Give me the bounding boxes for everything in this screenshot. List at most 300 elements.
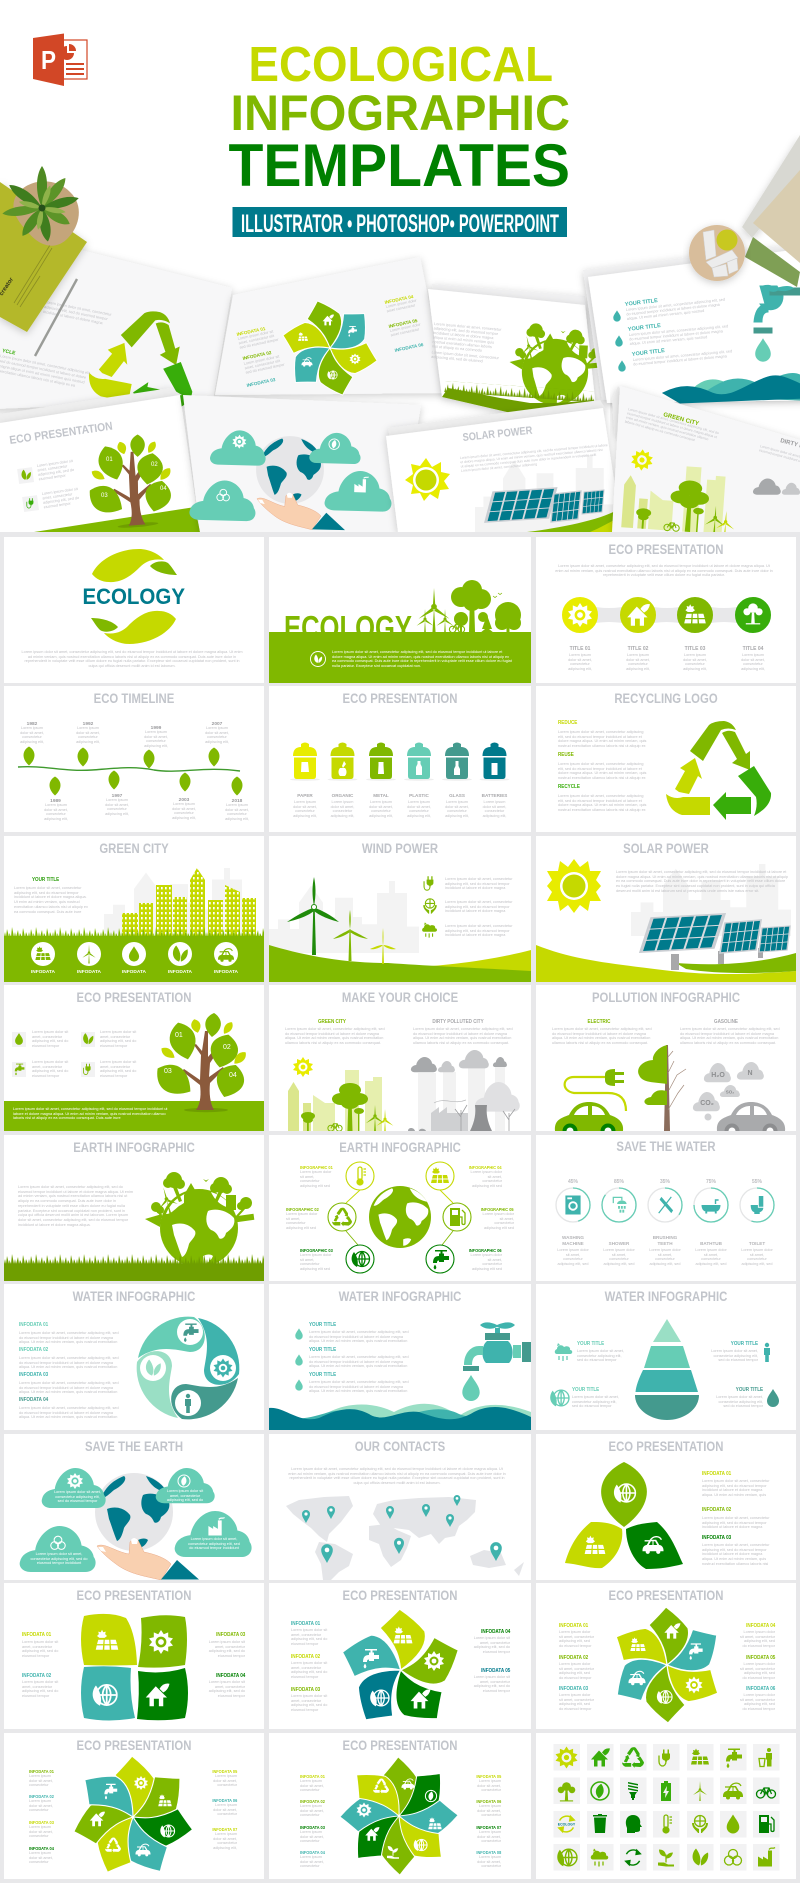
text block: Lorem ipsum dolor sit amet, consectetur adipiscing elit, sed do eiusmod tempor incididunt ut labore et dolore magna aliqua. Ut enim ad minim veniam, quis nostrud exercitation ullamco laboris nisi ut aliquip ex ea commodo consequat. Duis aute irure dolor in reprehenderit in voluptate velit esse cillum dolore eu fugiat nulla pariatur. Excepteur sint occaecat cupidatat non proident, sunt in culpa qui officia deserunt mollit anim id est laborum sed ut perspiciatis unde omnis iste natus error sit. bbox=[616, 870, 788, 893]
panel: six petals bbox=[536, 1583, 796, 1729]
stacked slide: tree: Lorem ipsum dolor sit bbox=[37, 459, 74, 468]
gauge circles: 35% bbox=[660, 1179, 671, 1185]
stacked slide: flower infographic: amet consectetur bbox=[390, 327, 420, 337]
heading: OUR CONTACTS bbox=[355, 1439, 445, 1454]
icon grid: ECOLOGY bbox=[558, 1822, 576, 1826]
tap and waves bbox=[269, 1322, 531, 1430]
timeline chart: 2007 bbox=[212, 721, 223, 727]
info list: YOUR TITLE bbox=[309, 1322, 336, 1328]
info blocks: INFODATA 02 bbox=[291, 1654, 320, 1660]
panel: earth infographic hexagon bbox=[269, 1135, 531, 1281]
petal diagram bbox=[74, 1756, 192, 1872]
label: reduce: REDUCE bbox=[558, 720, 577, 726]
labels and notes: INFOGRAPHIC 04 bbox=[469, 1165, 502, 1170]
panel: eight petals bbox=[269, 1733, 531, 1879]
stacked slide: solar power: et dolore magna aliqua. Ut enim ad minim veniam, quis nostrud exercitation ullamco laboris nisi bbox=[460, 448, 603, 464]
info blocks bbox=[291, 1621, 510, 1712]
earth illustration bbox=[4, 1172, 264, 1281]
stacked slide: tree: ECO PRESENTATION bbox=[9, 421, 113, 447]
info blocks: INFODATA 01 bbox=[29, 1769, 54, 1774]
info list: INFODATA 02 bbox=[19, 1347, 48, 1353]
solar illustration bbox=[536, 859, 796, 982]
info blocks: INFODATA 07 bbox=[212, 1827, 237, 1832]
stacked slide: flower infographic: INFODATA 03 bbox=[246, 377, 276, 388]
info list: Lorem ipsum dolor sit amet, consectetur adipiscing elit, sed do eiusmod tempor incididunt ut labore et dolore magna aliqua. Ut enim ad minim veniam, quis nostrud exercitation bbox=[19, 1331, 119, 1344]
process circles: TITLE 03 bbox=[685, 646, 706, 652]
info list: INFODATA 03 bbox=[19, 1372, 48, 1378]
labels and notes: Lorem ipsum dolor sit amet, consectetur adipiscing elit sed bbox=[483, 1212, 514, 1230]
gauge circles: MACHINE bbox=[562, 1241, 584, 1246]
info list: INFODATA 01 bbox=[19, 1322, 48, 1328]
heading: ECO PRESENTATION bbox=[609, 1439, 723, 1454]
stacked slide: green city: Lorem ipsum dolor sit amet, consectetur adipiscing elit, sed do bbox=[628, 407, 719, 435]
process circles bbox=[562, 597, 771, 652]
heading: ECO TIMELINE bbox=[94, 691, 174, 706]
tree and icons: 01 bbox=[175, 1032, 183, 1039]
stacked slide: recycling: sed do eiusmod tempor incididunt ut labore et dolore bbox=[0, 359, 86, 380]
info blocks: INFODATA 02 bbox=[29, 1794, 54, 1799]
heading: ECO PRESENTATION bbox=[609, 1588, 723, 1603]
petal diagram bbox=[340, 1758, 458, 1874]
desk item: magazine and plant bbox=[0, 166, 87, 356]
desk item: box, bowl and folder bbox=[689, 135, 800, 287]
car and tree illustration: H₂O bbox=[711, 1072, 725, 1079]
timeline chart: 1992 bbox=[83, 721, 94, 727]
leaf diagram bbox=[565, 1462, 683, 1569]
heading: POLLUTION INFOGRAPHIC bbox=[592, 990, 740, 1005]
petal diagram bbox=[81, 1614, 188, 1720]
heading: EARTH INFOGRAPHIC bbox=[339, 1140, 461, 1155]
bins: PAPER bbox=[297, 793, 313, 798]
stacked slide: flower infographic: amet, consectetur elit bbox=[244, 359, 281, 370]
heading: ECO PRESENTATION bbox=[77, 990, 191, 1005]
stacked slide: solar power: ut aliquip ex ea commodo consequat duis aute irure dolor in reprehenderit in voluptate velit bbox=[460, 453, 596, 469]
info blocks: INFODATA 04 bbox=[481, 1629, 510, 1635]
icon: PowerPoint logo bbox=[33, 34, 87, 86]
bin notes bbox=[293, 800, 506, 818]
bins bbox=[290, 742, 509, 798]
labels and notes: Lorem ipsum dolor sit amet, consectetur adipiscing elit sed bbox=[286, 1212, 317, 1230]
info blocks: INFODATA 06 bbox=[476, 1799, 501, 1804]
title: INFOGRAPHIC bbox=[230, 85, 570, 141]
panel: recycling bins bbox=[269, 686, 531, 832]
stacked slide: flower infographic bbox=[215, 257, 447, 408]
stacked slide: flower infographic: INFODATA 01 bbox=[236, 326, 266, 337]
stacked slide: recycling: adipiscing elit, sed do eiusmod tempor bbox=[44, 305, 109, 321]
info blocks: INFODATA 02 bbox=[559, 1655, 588, 1661]
column texts bbox=[568, 653, 765, 671]
stacked slide: green earth bbox=[428, 284, 604, 415]
info blocks: INFODATA 03 bbox=[216, 1632, 245, 1638]
year notes bbox=[20, 726, 249, 821]
city illustrations bbox=[288, 1050, 520, 1131]
stacked slide: flower infographic: sed do eiusmod tempor bbox=[239, 337, 280, 350]
info list bbox=[309, 1322, 409, 1393]
tree and icons: 03 bbox=[164, 1068, 172, 1075]
layered drop bbox=[550, 1319, 779, 1420]
title: TEMPLATES bbox=[228, 132, 570, 199]
software banner: ILLUSTRATOR • PHOTOSHOP• POWERPOINT bbox=[241, 210, 559, 238]
band bbox=[4, 1101, 264, 1131]
heading: WATER INFOGRAPHIC bbox=[605, 1289, 727, 1304]
panel: seven petals bbox=[4, 1733, 264, 1879]
stacked slide: tree: eiusmod tempor bbox=[38, 474, 67, 481]
stacked slide: water: do eiusmod tempor incididunt ut labore et dolore magna bbox=[629, 329, 724, 341]
stacked slide: recycling bbox=[0, 222, 232, 418]
petal diagram bbox=[617, 1608, 717, 1722]
skyline and icons: INFODATA bbox=[122, 969, 147, 975]
gauge circles: SHOWER bbox=[609, 1241, 630, 1246]
panel: three leaves bbox=[536, 1434, 796, 1580]
car and tree illustration: N bbox=[747, 1070, 753, 1077]
stacked slide: green earth: aliqua ut enim ad minim veniam quis bbox=[433, 335, 494, 345]
info blocks: INFODATA 02 bbox=[22, 1673, 51, 1679]
gauge circles: 85% bbox=[614, 1179, 625, 1185]
heading: WATER INFOGRAPHIC bbox=[73, 1289, 195, 1304]
label: YOUR TITLE bbox=[32, 877, 59, 883]
gauge circles: BRUSHING bbox=[653, 1235, 678, 1240]
stacked slide: water: YOUR TITLE bbox=[628, 323, 662, 333]
info blocks: INFODATA 02 bbox=[300, 1799, 325, 1804]
heading: ECO PRESENTATION bbox=[77, 1588, 191, 1603]
stacked slide: water: do eiusmod tempor incididunt ut labore et dolore magna bbox=[626, 303, 721, 316]
car and tree illustration: CO₂ bbox=[700, 1100, 714, 1107]
panel: eco timeline bbox=[4, 686, 264, 832]
gauge circles: 75% bbox=[706, 1179, 717, 1185]
panel: our contacts bbox=[269, 1434, 531, 1580]
icon: PowerPoint logo: P bbox=[41, 45, 56, 75]
car and tree illustration: SO₂ bbox=[726, 1090, 734, 1094]
timeline chart: 1982 bbox=[27, 721, 38, 727]
panel: ecology silhouette: ECOLOGY bbox=[284, 609, 412, 646]
heading: WIND POWER bbox=[362, 841, 438, 856]
tree and icons: 02 bbox=[223, 1044, 231, 1051]
heading: SOLAR POWER bbox=[623, 841, 709, 856]
stacked slide: flower infographic: INFODATA 04 bbox=[384, 294, 414, 305]
info blocks: INFODATA 05 bbox=[476, 1774, 501, 1779]
process circles: TITLE 04 bbox=[743, 646, 764, 652]
info list: YOUR TITLE bbox=[309, 1347, 336, 1353]
stacked slide: flower infographic: INFODATA 06 bbox=[394, 342, 424, 353]
bins: ORGANIC bbox=[332, 793, 354, 798]
info blocks: INFODATA 08 bbox=[476, 1850, 501, 1855]
stacked slide: green earth: incididunt ut labore et dolore magna bbox=[433, 331, 495, 340]
labels and notes: INFOGRAPHIC 05 bbox=[481, 1207, 514, 1212]
info list: Lorem ipsum dolor sit amet, consectetur adipiscing elit, sed do eiusmod tempor incididunt ut labore et dolore magna aliqua. Ut enim ad minim veniam, quis nostrud exercitation bbox=[309, 1355, 409, 1368]
gauge circles: BATHTUB bbox=[700, 1241, 723, 1246]
heading: SAVE THE WATER bbox=[616, 1139, 716, 1154]
info blocks bbox=[269, 1771, 531, 1871]
heading: ECO PRESENTATION bbox=[609, 542, 723, 557]
panel: save the earth bbox=[4, 1434, 264, 1580]
cloud notes bbox=[30, 1489, 240, 1565]
panel: pollution infographic bbox=[536, 985, 796, 1131]
stacked slide: green earth: Lorem ipsum dolor sit amet, consectetur bbox=[431, 350, 500, 360]
stacked slide: green earth: Lorem ipsum dolor sit amet, consectetur bbox=[434, 322, 502, 332]
text block: Lorem ipsum dolor sit amet, consectetur adipiscing elit, sed do eiusmod tempor incididunt ut labore et dolore magna aliqua. Ut enim ad minim veniam, quis nostrud exercitation ullamco laboris nisi ut aliquip ex ea commodo consequat. Duis aute irure dolor in reprehenderit in voluptate velit esse cillum dolore eu fugiat nulla pariatur. Excepteur sint occaecat cupidatat non. bbox=[332, 650, 512, 668]
stacked slide: tree: 03 bbox=[101, 493, 108, 499]
stacked slide: green city: enim ad minim veniam, quis nostrud exercitation ullamco bbox=[626, 415, 709, 441]
labels and notes: Lorem ipsum dolor sit amet, consectetur adipiscing elit sed bbox=[300, 1170, 331, 1188]
panel: eco presentation tree bbox=[4, 985, 264, 1131]
stacked slide: tree: amet, consectetur bbox=[42, 492, 73, 500]
labels and notes: INFOGRAPHIC 06 bbox=[469, 1248, 502, 1253]
panel: recycling logo bbox=[536, 686, 796, 832]
skyline and icons: INFODATA bbox=[31, 969, 56, 975]
tree and icons: 04 bbox=[229, 1072, 237, 1079]
timeline chart: 1999 bbox=[151, 725, 162, 731]
notes bbox=[557, 1248, 773, 1266]
gauge circles: 55% bbox=[752, 1179, 763, 1185]
stacked slide: recycling: incididunt ut labore et dolore magna bbox=[43, 310, 104, 325]
stacked slide: green city: laboris nisi ut aliquip ex ea commodo consequat bbox=[624, 420, 695, 442]
info blocks: YOUR TITLE bbox=[736, 1387, 763, 1393]
label: recycle: RECYCLE bbox=[558, 784, 580, 790]
stacked slide: tree: 01 bbox=[106, 457, 113, 463]
stacked slide: water: Lorem ipsum dolor sit amet, consectetur adipiscing elit, sed bbox=[626, 298, 725, 312]
labels and notes: Lorem ipsum dolor sit amet, consectetur adipiscing elit sed bbox=[471, 1170, 502, 1188]
stacked slide: green earth: nostrud exercitation ullamco laboris bbox=[432, 340, 492, 349]
info blocks bbox=[559, 1623, 776, 1711]
timeline chart: 2018 bbox=[232, 798, 243, 804]
stacked slide: green earth: adipiscing elit, sed do eiusmod bbox=[431, 355, 483, 363]
gauge circles: WASHING bbox=[562, 1235, 584, 1240]
heading: ECO PRESENTATION bbox=[343, 1738, 457, 1753]
gauge circles bbox=[556, 1179, 775, 1246]
info blocks: INFODATA 04 bbox=[300, 1850, 325, 1855]
stacked slide: flower infographic: Lorem ipsum dolor sit bbox=[237, 329, 275, 341]
heading: ECO PRESENTATION bbox=[343, 691, 457, 706]
stacked slide: water: do eiusmod tempor incididunt ut labore et dolore magna bbox=[633, 354, 728, 366]
timeline chart: 1997 bbox=[112, 793, 123, 799]
stacked slide: solar power: Lorem ipsum dolor sit amet, consectetur adipiscing bbox=[461, 462, 537, 473]
info list bbox=[19, 1322, 119, 1419]
title bbox=[228, 38, 570, 199]
panel: save the water bbox=[536, 1135, 796, 1281]
panel: five petals bbox=[269, 1583, 531, 1729]
info list: Lorem ipsum dolor sit amet, consectetur adipiscing elit, sed do eiusmod tempor incididunt ut labore et dolore magna aliqua. Ut enim ad minim veniam, quis nostrud exercitation bbox=[19, 1381, 119, 1394]
stacked slide: water: YOUR TITLE bbox=[632, 348, 666, 358]
stacked slide: solar power bbox=[386, 400, 622, 533]
icon grid bbox=[536, 1733, 796, 1879]
labels and notes: INFOGRAPHIC 02 bbox=[286, 1207, 319, 1212]
skyline and icons: INFODATA bbox=[77, 969, 102, 975]
stacked slide: green city bbox=[612, 386, 800, 537]
world map with pins bbox=[286, 1495, 524, 1580]
bins: METAL bbox=[373, 793, 389, 798]
panel: make your choice bbox=[269, 985, 531, 1131]
info list: INFODATA 04 bbox=[19, 1397, 48, 1403]
gauge circles: TOILET bbox=[749, 1241, 765, 1246]
info blocks: INFODATA 05 bbox=[212, 1769, 237, 1774]
info list: INFODATA 03 bbox=[702, 1535, 731, 1541]
labels and notes bbox=[286, 1165, 514, 1271]
stacked slide: tree: adipiscing elit, sed do bbox=[38, 468, 74, 477]
heading: ECO PRESENTATION bbox=[343, 1588, 457, 1603]
text block: Lorem ipsum dolor sit amet, consectetur adipiscing elit, sed do eiusmod tempor incididunt ut labore et dolore magna aliqua. Ut enim ad minim veniam, quis nostrud exercitation ullamco laboris nisi ut aliquip ex ea commodo consequat. Duis aute irure dolor in reprehenderit in voluptate velit esse cillum dolore eu fugiat nulla pariatur. Excepteur sint occaecat cupidatat non proident, sunt in culpa qui officia deserunt mollit anim id est laborum. Lorem ipsum dolor sit amet, consectetur adipiscing elit, sed do eiusmod tempor incididunt ut labore et dolore magna aliqua. bbox=[18, 1185, 133, 1227]
stacked slide: tree: Lorem ipsum dolor sit bbox=[42, 487, 79, 496]
info list: Lorem ipsum dolor sit amet, consectetur adipiscing elit, sed do eiusmod tempor incididunt ut labore et dolore magna aliqua. Ut enim ad minim veniam, quis nostrud exercitation bbox=[19, 1356, 119, 1369]
stacked slide: recycling: magna aliqua ut enim ad minim veniam quis nostrud bbox=[0, 364, 85, 385]
stacked slide: flower infographic: sed do eiusmod tempor bbox=[245, 362, 286, 375]
text group bbox=[13, 1030, 168, 1120]
stacked slide: flower infographic: INFODATA 02 bbox=[242, 350, 272, 361]
info list: Lorem ipsum dolor sit amet, consectetur adipiscing elit, sed do eiusmod tempor incididunt ut labore et dolore magna aliqua. Ut enim ad minim veniam, quis nostrud exercitation bbox=[19, 1406, 119, 1419]
skyline and icons: INFODATA bbox=[214, 969, 239, 975]
panel: green city bbox=[4, 836, 264, 982]
heading: WATER INFOGRAPHIC bbox=[339, 1289, 461, 1304]
info blocks: INFODATA 03 bbox=[291, 1687, 320, 1693]
labels and notes: INFOGRAPHIC 03 bbox=[300, 1248, 333, 1253]
software banner bbox=[232, 207, 567, 238]
stacked slide: tree: eiusmod tempor bbox=[43, 502, 72, 509]
stacked slide: water: Lorem ipsum dolor sit amet, consectetur adipiscing elit, sed bbox=[633, 349, 732, 362]
labels and notes: Lorem ipsum dolor sit amet, consectetur adipiscing elit sed bbox=[300, 1253, 331, 1271]
info list: YOUR TITLE bbox=[309, 1372, 336, 1378]
swirl wheel bbox=[136, 1316, 240, 1420]
label: ELECTRIC bbox=[588, 1018, 610, 1024]
stacked slide: water: aliqua. Ut enim ad minim veniam, quis nostrud bbox=[627, 309, 704, 321]
info blocks: YOUR TITLE bbox=[572, 1387, 599, 1393]
panel: four petals bbox=[4, 1583, 264, 1729]
info blocks: YOUR TITLE bbox=[731, 1341, 758, 1347]
thumbnail grid background bbox=[0, 532, 800, 1883]
labels and notes: INFOGRAPHIC 01 bbox=[300, 1165, 333, 1170]
heading: EARTH INFOGRAPHIC bbox=[73, 1140, 195, 1155]
stacked slide: tree: 04 bbox=[160, 486, 167, 492]
stacked slide: tree bbox=[0, 388, 200, 532]
stacked slide: flower infographic: INFODATA 05 bbox=[388, 318, 418, 329]
process circles: TITLE 02 bbox=[628, 646, 649, 652]
info list bbox=[702, 1471, 770, 1566]
info list: Lorem ipsum dolor sit amet, consectetur adipiscing elit, sed do eiusmod tempor incididunt ut labore et dolore magna aliqua. Ut enim ad minim veniam, quis nostrud exercitation bbox=[309, 1380, 409, 1393]
panel: eco presentation circles bbox=[536, 537, 796, 683]
stacked slide: water: Lorem ipsum dolor sit amet, consectetur adipiscing elit, sed bbox=[629, 324, 728, 337]
label: GREEN CITY bbox=[318, 1018, 346, 1024]
stacked slide: flower infographic: amet consectetur bbox=[386, 303, 416, 313]
stacked slide: water: aliqua. Ut enim ad minim veniam, quis nostrud bbox=[630, 335, 707, 346]
hero banner bbox=[0, 34, 800, 532]
info blocks: YOUR TITLE bbox=[577, 1341, 604, 1347]
text block: Lorem ipsum dolor sit amet, consectetur adipiscing elit, sed do eiusmod tempor incididunt ut labore et dolore magna aliqua. Ut enim ad minim veniam, quis nostrud exercitation ullamco laboris nisi ut aliquip ex ea commodo consequat. Duis aute irure dolor in reprehenderit in voluptate velit esse cillum dolore eu fugiat nulla pariatur. Excepteur sint occaecat cupidatat non proident, sunt in culpa qui officia deserunt mollit anim id est laborum. bbox=[22, 650, 242, 668]
heading: MAKE YOUR CHOICE bbox=[342, 990, 458, 1005]
panel: water infographic tap bbox=[269, 1284, 531, 1430]
heading: ECO PRESENTATION bbox=[77, 1738, 191, 1753]
timeline chart bbox=[18, 721, 243, 804]
stacked slide: recycling: Lorem ipsum dolor sit amet, consectetur adipiscing elit bbox=[0, 354, 91, 376]
stacked slide: green city: eiusmod tempor incididunt ut labore et dolore magna aliqua ut bbox=[627, 411, 717, 439]
info blocks: INFODATA 01 bbox=[22, 1632, 51, 1638]
info list: INFODATA 01 bbox=[702, 1471, 731, 1477]
stacked slide: save the earth bbox=[183, 395, 421, 532]
skyline and icons: INFODATA bbox=[168, 969, 193, 975]
car and tree illustration bbox=[554, 1045, 786, 1131]
panel: icon set bbox=[536, 1733, 796, 1879]
gauge circles: TEETH bbox=[657, 1241, 673, 1246]
info blocks: INFODATA 01 bbox=[291, 1621, 320, 1627]
info blocks: INFODATA 07 bbox=[476, 1825, 501, 1830]
recycle icon bbox=[666, 721, 772, 820]
heading: SAVE THE EARTH bbox=[85, 1439, 183, 1454]
wind farm illustration bbox=[269, 876, 531, 982]
stacked slide: green earth: nisi ut aliquip ex ea commodo bbox=[432, 344, 482, 353]
clouds and globe bbox=[20, 1468, 252, 1580]
info blocks: INFODATA 05 bbox=[746, 1655, 775, 1661]
petal diagram bbox=[343, 1610, 458, 1720]
cloud notes: Lorem ipsum dolor sit amet, consectetur adipiscing elit, sed do eiusmod tempor incididunt bbox=[30, 1552, 88, 1565]
stacked slide: water: YOUR TITLE bbox=[625, 298, 659, 308]
info blocks: INFODATA 06 bbox=[212, 1798, 237, 1803]
info blocks: INFODATA 01 bbox=[559, 1623, 588, 1629]
label: DIRTY POLLUTED CITY bbox=[432, 1018, 484, 1024]
label: reuse: REUSE bbox=[558, 752, 574, 758]
panel: water infographic wheel bbox=[4, 1284, 264, 1430]
heading: GREEN CITY bbox=[99, 841, 169, 856]
stacked slide: solar power: SOLAR POWER bbox=[462, 425, 533, 444]
info blocks: INFODATA 03 bbox=[300, 1825, 325, 1830]
info blocks: INFODATA 03 bbox=[559, 1686, 588, 1692]
bins: GLASS bbox=[449, 793, 465, 798]
labels and notes: Lorem ipsum dolor sit amet, consectetur adipiscing elit sed bbox=[471, 1253, 502, 1271]
panel: earth infographic with grass bbox=[4, 1135, 264, 1281]
timeline chart: 1989 bbox=[50, 798, 61, 804]
info blocks: INFODATA 03 bbox=[29, 1820, 54, 1825]
stacked slide: flower infographic: Lorem ipsum dolor bbox=[389, 322, 422, 333]
cloud notes: Lorem ipsum dolor sit amet, consectetur adipiscing elit, sed do eiusmod tempor bbox=[54, 1490, 101, 1503]
panel: wind power bbox=[269, 836, 531, 982]
info blocks: INFODATA 06 bbox=[746, 1686, 775, 1692]
info list: INFODATA 02 bbox=[702, 1507, 731, 1513]
info blocks: INFODATA 04 bbox=[216, 1673, 245, 1679]
stacked slide: solar power: Lorem ipsum dolor sit amet, consectetur adipiscing elit, sed do eiusmod tempor incididunt ut labore bbox=[460, 443, 608, 460]
cloud notes: Lorem ipsum dolor sit amet, consectetur adipiscing elit, sed do eiusmod tempor incididunt bbox=[188, 1537, 240, 1550]
hexagon diagram bbox=[327, 1162, 472, 1274]
label: GASOLINE bbox=[714, 1018, 738, 1024]
heading: RECYCLING LOGO bbox=[614, 691, 718, 706]
stacked slide: green earth: adipiscing elit, sed do eiusmod tempor bbox=[434, 326, 499, 336]
stacked slide: flower infographic: Lorem ipsum dolor bbox=[385, 298, 418, 309]
panel: solar power bbox=[536, 836, 796, 982]
stacked slide: tree: 02 bbox=[151, 462, 158, 468]
stacked slide: recycling: Lorem ipsum dolor sit amet, consectetur bbox=[45, 300, 113, 317]
title: ECOLOGICAL bbox=[248, 38, 553, 92]
intro text: Lorem ipsum dolor sit amet, consectetur adipiscing elit, sed do eiusmod tempor incididunt ut labore et dolore magna aliqua. Ut enim ad minim veniam, quis nostrud exercitation ullamco laboris nisi ut aliquip ex ea commodo consequat. Duis aute irure dolor in reprehenderit in voluptate velit esse cillum dolore eu fugiat nulla pariatur. bbox=[555, 564, 773, 577]
info blocks bbox=[22, 1632, 246, 1698]
timeline chart: 2003 bbox=[179, 797, 190, 803]
bins: BATTERIES bbox=[482, 793, 507, 798]
skyline and icons bbox=[4, 868, 264, 982]
stacked slide: water bbox=[583, 240, 800, 403]
info blocks bbox=[29, 1769, 238, 1864]
panel: water infographic drop bbox=[536, 1284, 796, 1430]
stacked slide: green city: GREEN CITY bbox=[662, 412, 699, 427]
info blocks: INFODATA 04 bbox=[29, 1846, 54, 1851]
panel: ecology logo: ECOLOGY bbox=[82, 584, 185, 609]
text block: Lorem ipsum dolor sit amet, consectetur adipiscing elit, sed do eiusmod tempor incididunt ut labore et dolore magna aliqua. Ut enim ad minim veniam, quis nostrud exercitation ullamco laboris nisi ut aliquip ex ea commodo consequat. Duis aute irure dolor in reprehenderit in voluptate velit esse cillum dolore eu fugiat nulla pariatur. Excepteur sint occaecat cupidatat non proident, sunt in culpa qui officia deserunt mollit anim id est laborum. bbox=[288, 1467, 506, 1485]
stacked slide: flower infographic: Lorem ipsum dolor sit bbox=[243, 354, 281, 366]
stacked slide: flower infographic: amet, consectetur elit bbox=[238, 334, 275, 345]
stacked slide: tree: amet, consectetur bbox=[37, 464, 68, 472]
bins: PLASTIC bbox=[409, 793, 430, 798]
text group: Lorem ipsum dolor sit amet, consectetur adipiscing elit, sed do eiusmod tempor incididunt ut labore et dolore magna aliqua. Ut enim ad minim veniam, quis nostrud exercitation ullamco laboris nisi ut aliquip ex ea commodo consequat. Duis aute irure bbox=[13, 1107, 167, 1120]
info list: Lorem ipsum dolor sit amet, consectetur adipiscing elit, sed do eiusmod tempor incididunt ut labore et dolore magna aliqua. Ut enim ad minim veniam, quis nostrud exercitation bbox=[309, 1330, 409, 1343]
info blocks bbox=[572, 1341, 763, 1408]
info blocks: INFODATA 05 bbox=[481, 1668, 510, 1674]
stacked slide: recycling: YCLE bbox=[2, 348, 17, 357]
process circles: TITLE 01 bbox=[570, 646, 591, 652]
info blocks: INFODATA 01 bbox=[300, 1774, 325, 1779]
gauge circles: 45% bbox=[568, 1179, 579, 1185]
